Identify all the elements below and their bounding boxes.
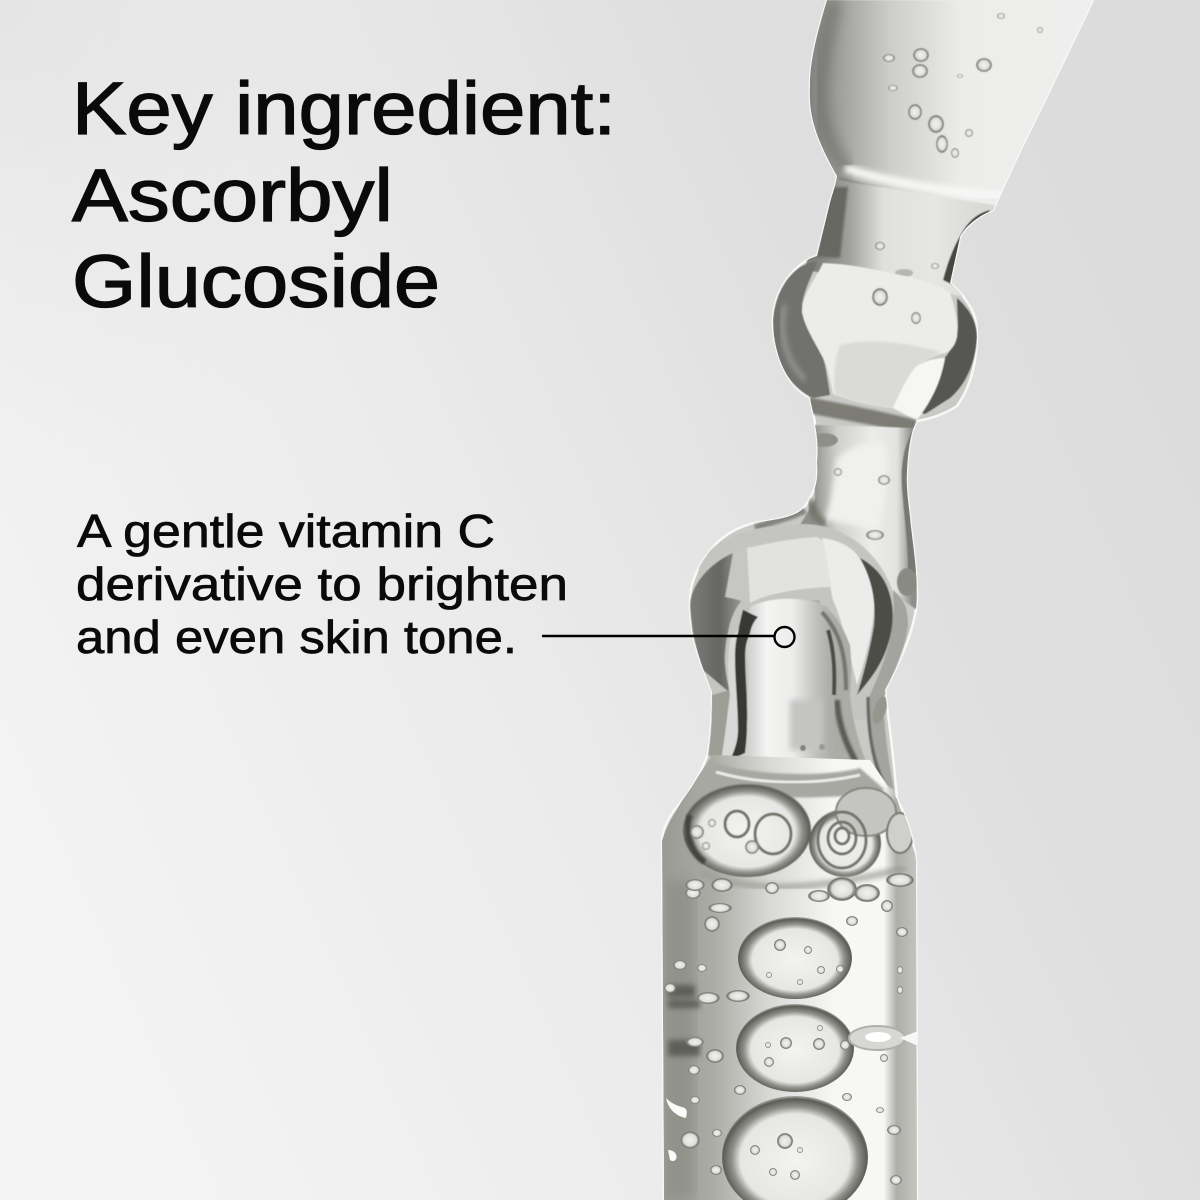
- top bubble cluster: [683, 783, 913, 887]
- lens flare bubble: [849, 1026, 918, 1050]
- dark left strip: [730, 610, 758, 760]
- top light panel: [747, 537, 830, 603]
- dropper with serum illustration: [662, 0, 1100, 1200]
- dropper silhouette: [662, 0, 1093, 1200]
- outer strand: [868, 590, 908, 790]
- stalk band right: [812, 600, 866, 760]
- top reservoir: [800, 0, 1100, 215]
- description text: derivative to brighten: [76, 558, 568, 610]
- lower reservoir: [662, 755, 917, 1200]
- description text: and even skin tone.: [76, 611, 517, 663]
- title: Glucoside: [72, 240, 440, 323]
- title: Ascorbyl: [72, 154, 393, 237]
- dark right arc: [857, 558, 893, 695]
- upper bulb: [773, 262, 977, 432]
- description text: A gentle vitamin C: [77, 505, 495, 557]
- upper neck: [805, 178, 1000, 300]
- left edge glints: [666, 1098, 687, 1161]
- title: Key ingredient:: [72, 67, 616, 150]
- dark right lines: [828, 630, 834, 695]
- dark left crescent: [690, 553, 742, 693]
- bubbles in reservoir: [882, 12, 1044, 158]
- description text: [76, 505, 568, 663]
- title: [72, 67, 616, 323]
- outer left strip and neck body: [708, 690, 730, 756]
- core: [741, 598, 828, 758]
- middle neck and strand: [755, 425, 920, 610]
- inner stalk: [708, 598, 866, 760]
- lower bulb: [690, 524, 917, 790]
- row of small bubbles: [664, 873, 914, 1185]
- callout leader line with ring marker: [542, 627, 794, 647]
- right light arc: [822, 538, 874, 685]
- three large bubbles: [722, 917, 868, 1200]
